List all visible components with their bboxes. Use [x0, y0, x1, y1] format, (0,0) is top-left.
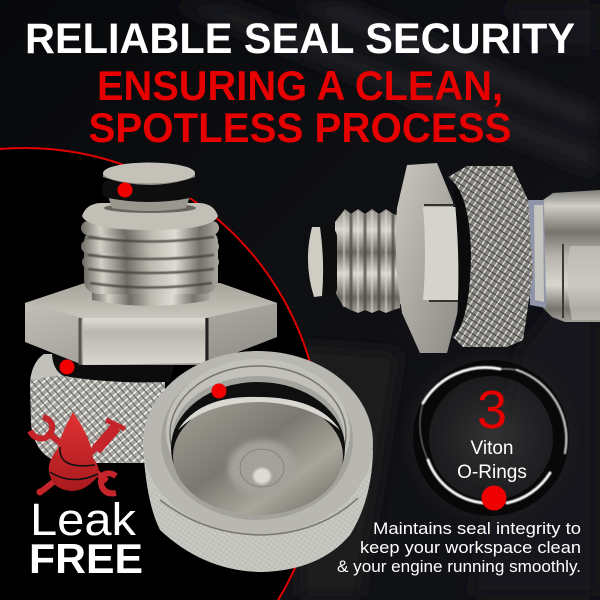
description text: & your engine running smoothly. [337, 557, 581, 576]
text: free: FREE [29, 535, 143, 582]
label: viton o-rings: Viton [471, 438, 513, 459]
label: viton o-rings [457, 438, 527, 483]
o-ring [453, 183, 473, 336]
description text: Maintains seal integrity to [373, 519, 581, 538]
knurled body [30, 354, 165, 463]
label: viton o-rings: O-Rings [457, 462, 527, 483]
subtitle: ensuring a clean, spotless process [88, 62, 512, 151]
hex nut [396, 163, 460, 353]
cap rim [143, 351, 373, 535]
product: end cap [143, 351, 373, 572]
top flange [82, 203, 218, 230]
neck [92, 285, 210, 306]
text: leak: Leak [30, 494, 137, 545]
tip disk [308, 227, 323, 297]
title: reliable seal security: RELIABLE SEAL SECURITY [25, 15, 575, 63]
rear fitting [543, 190, 600, 322]
callout markers: red dots [60, 182, 226, 398]
description text: keep your workspace clean [360, 538, 581, 557]
product: threaded plug [25, 162, 277, 463]
marker dot [482, 486, 506, 510]
thread [81, 221, 219, 294]
o-ring top [102, 180, 196, 202]
hex [25, 283, 277, 365]
black area inside arc [0, 148, 322, 600]
o-ring callout [399, 346, 583, 530]
description text [337, 519, 581, 576]
neck [395, 216, 425, 304]
numeral: 3 [477, 380, 507, 440]
icon: droplet with wrenches [30, 412, 125, 496]
o-ring [421, 368, 561, 508]
subtitle: ensuring a clean, spotless process: SPOTLESS PROCESS [88, 104, 512, 151]
neck below o-ring [108, 196, 190, 211]
o-ring under hex [52, 352, 178, 382]
subtitle: ensuring a clean, spotless process: ENSURING A CLEAN, [97, 62, 503, 109]
cap side [143, 440, 373, 572]
cap floor [173, 397, 343, 515]
leak free badge [29, 412, 143, 582]
product: connector side view [308, 163, 600, 353]
tip o-ring [320, 227, 337, 297]
dark groove [171, 382, 345, 514]
thread [335, 209, 400, 313]
knurled collar [448, 166, 533, 347]
cap disc [103, 173, 195, 185]
